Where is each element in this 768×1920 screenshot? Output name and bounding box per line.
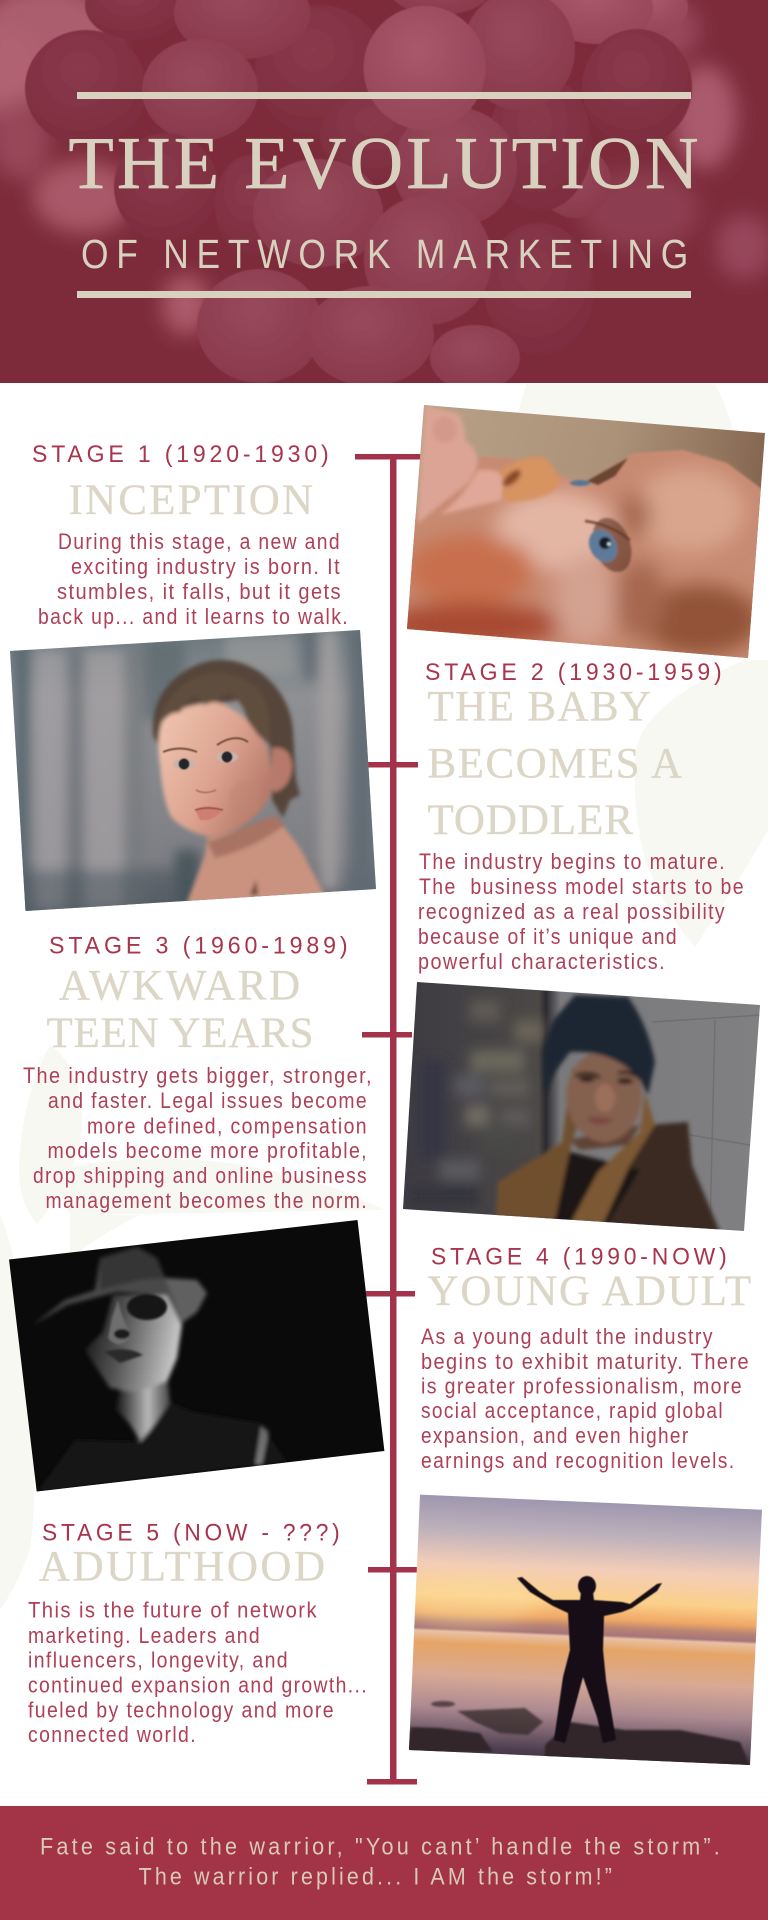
quote text: The warrior replied... I AM the storm!” [139, 1863, 615, 1890]
body: stage 3: more defined, compensation [87, 1114, 368, 1138]
stage 4 text [421, 1244, 751, 1473]
toddler body [186, 815, 325, 905]
heading: awkward teen years: AWKWARD [59, 963, 300, 1010]
body: stage 2: The industry begins to mature. [419, 849, 726, 874]
body: stage 5: continued expansion and growth... [28, 1673, 368, 1698]
photo: baby close-up [407, 405, 765, 658]
stage 5 text [28, 1520, 368, 1747]
photo: silhouette at sunset [409, 1494, 762, 1765]
body: stage 1: During this stage, a new and [58, 529, 341, 554]
photo: toddler [5, 625, 380, 920]
body: stage 3 [23, 1063, 373, 1213]
heading: inception: INCEPTION [68, 477, 313, 524]
body: stage 5: influencers, longevity, and [28, 1648, 289, 1673]
stage 2 text [418, 659, 745, 974]
body: stage 5: connected world. [28, 1722, 197, 1747]
body: stage 2: recognized as a real possibility [418, 899, 726, 924]
heading: the evolution: THE EVOLUTION [68, 123, 698, 205]
heading: the baby becomes a toddler: THE BABY [428, 683, 651, 730]
stage 1 text: STAGE 1 (1920-1930) [32, 441, 332, 468]
stage 5 text: STAGE 5 (NOW - ???) [42, 1520, 344, 1546]
body: stage 4: social acceptance, rapid global [421, 1398, 724, 1423]
stage 3 text [23, 932, 373, 1213]
timeline [355, 454, 421, 1784]
rocks [405, 1701, 752, 1770]
body: stage 5 [28, 1598, 368, 1747]
body: stage 3: and faster. Legal issues become [48, 1088, 368, 1113]
silhouette [517, 1576, 662, 1743]
header panel with grape photo [0, 0, 768, 391]
body: stage 1: back up... and it learns to walk. [38, 604, 349, 629]
heading: the baby becomes a toddler [428, 683, 682, 844]
body: stage 4: expansion, and even higher [421, 1423, 690, 1448]
heading: awkward teen years [46, 963, 314, 1057]
heading: awkward teen years: TEEN YEARS [46, 1010, 314, 1057]
photo: figure in hat and sunglasses [5, 1215, 390, 1495]
body: stage 3: management becomes the norm. [46, 1188, 368, 1213]
blurred background bokeh [0, 0, 768, 335]
stage 2 text: STAGE 2 (1930-1959) [425, 659, 726, 686]
nose [500, 456, 560, 502]
background leaf shapes [0, 384, 768, 1610]
heading: adulthood: ADULTHOOD [39, 1543, 325, 1590]
body: stage 3: drop shipping and online business [33, 1163, 368, 1188]
heading: the baby becomes a toddler: TODDLER [428, 797, 633, 844]
photo: teen with beanie [400, 980, 765, 1235]
body: stage 2: because of it’s unique and [418, 924, 678, 949]
stage 4 text: STAGE 4 (1990-NOW) [431, 1244, 730, 1271]
body: stage 4 [421, 1324, 750, 1473]
grape cluster [25, 0, 692, 391]
heading: young adult: YOUNG ADULT [428, 1268, 751, 1315]
body: stage 5: fueled by technology and more [28, 1698, 335, 1722]
body: stage 4: As a young adult the industry [421, 1324, 714, 1349]
title block [68, 92, 698, 298]
body: stage 5: marketing. Leaders and [28, 1623, 261, 1648]
footer quote band [0, 1806, 768, 1920]
body: stage 1: exciting industry is born. It [71, 554, 341, 579]
body: stage 1: stumbles, it falls, but it gets [57, 579, 342, 604]
eye [569, 458, 632, 573]
stage 1 text [32, 441, 349, 629]
body: stage 3: models become more profitable, [48, 1138, 368, 1163]
body: stage 1 [38, 529, 349, 629]
heading: the baby becomes a toddler: BECOMES A [428, 740, 682, 788]
body: stage 2 [418, 849, 745, 974]
quote text [40, 1834, 723, 1890]
body: stage 2: powerful characteristics. [418, 949, 666, 974]
body: stage 5: This is the future of network [28, 1598, 318, 1623]
stage 3 text: STAGE 3 (1960-1989) [49, 932, 352, 960]
body: stage 3: The industry gets bigger, stronger, [23, 1063, 373, 1088]
